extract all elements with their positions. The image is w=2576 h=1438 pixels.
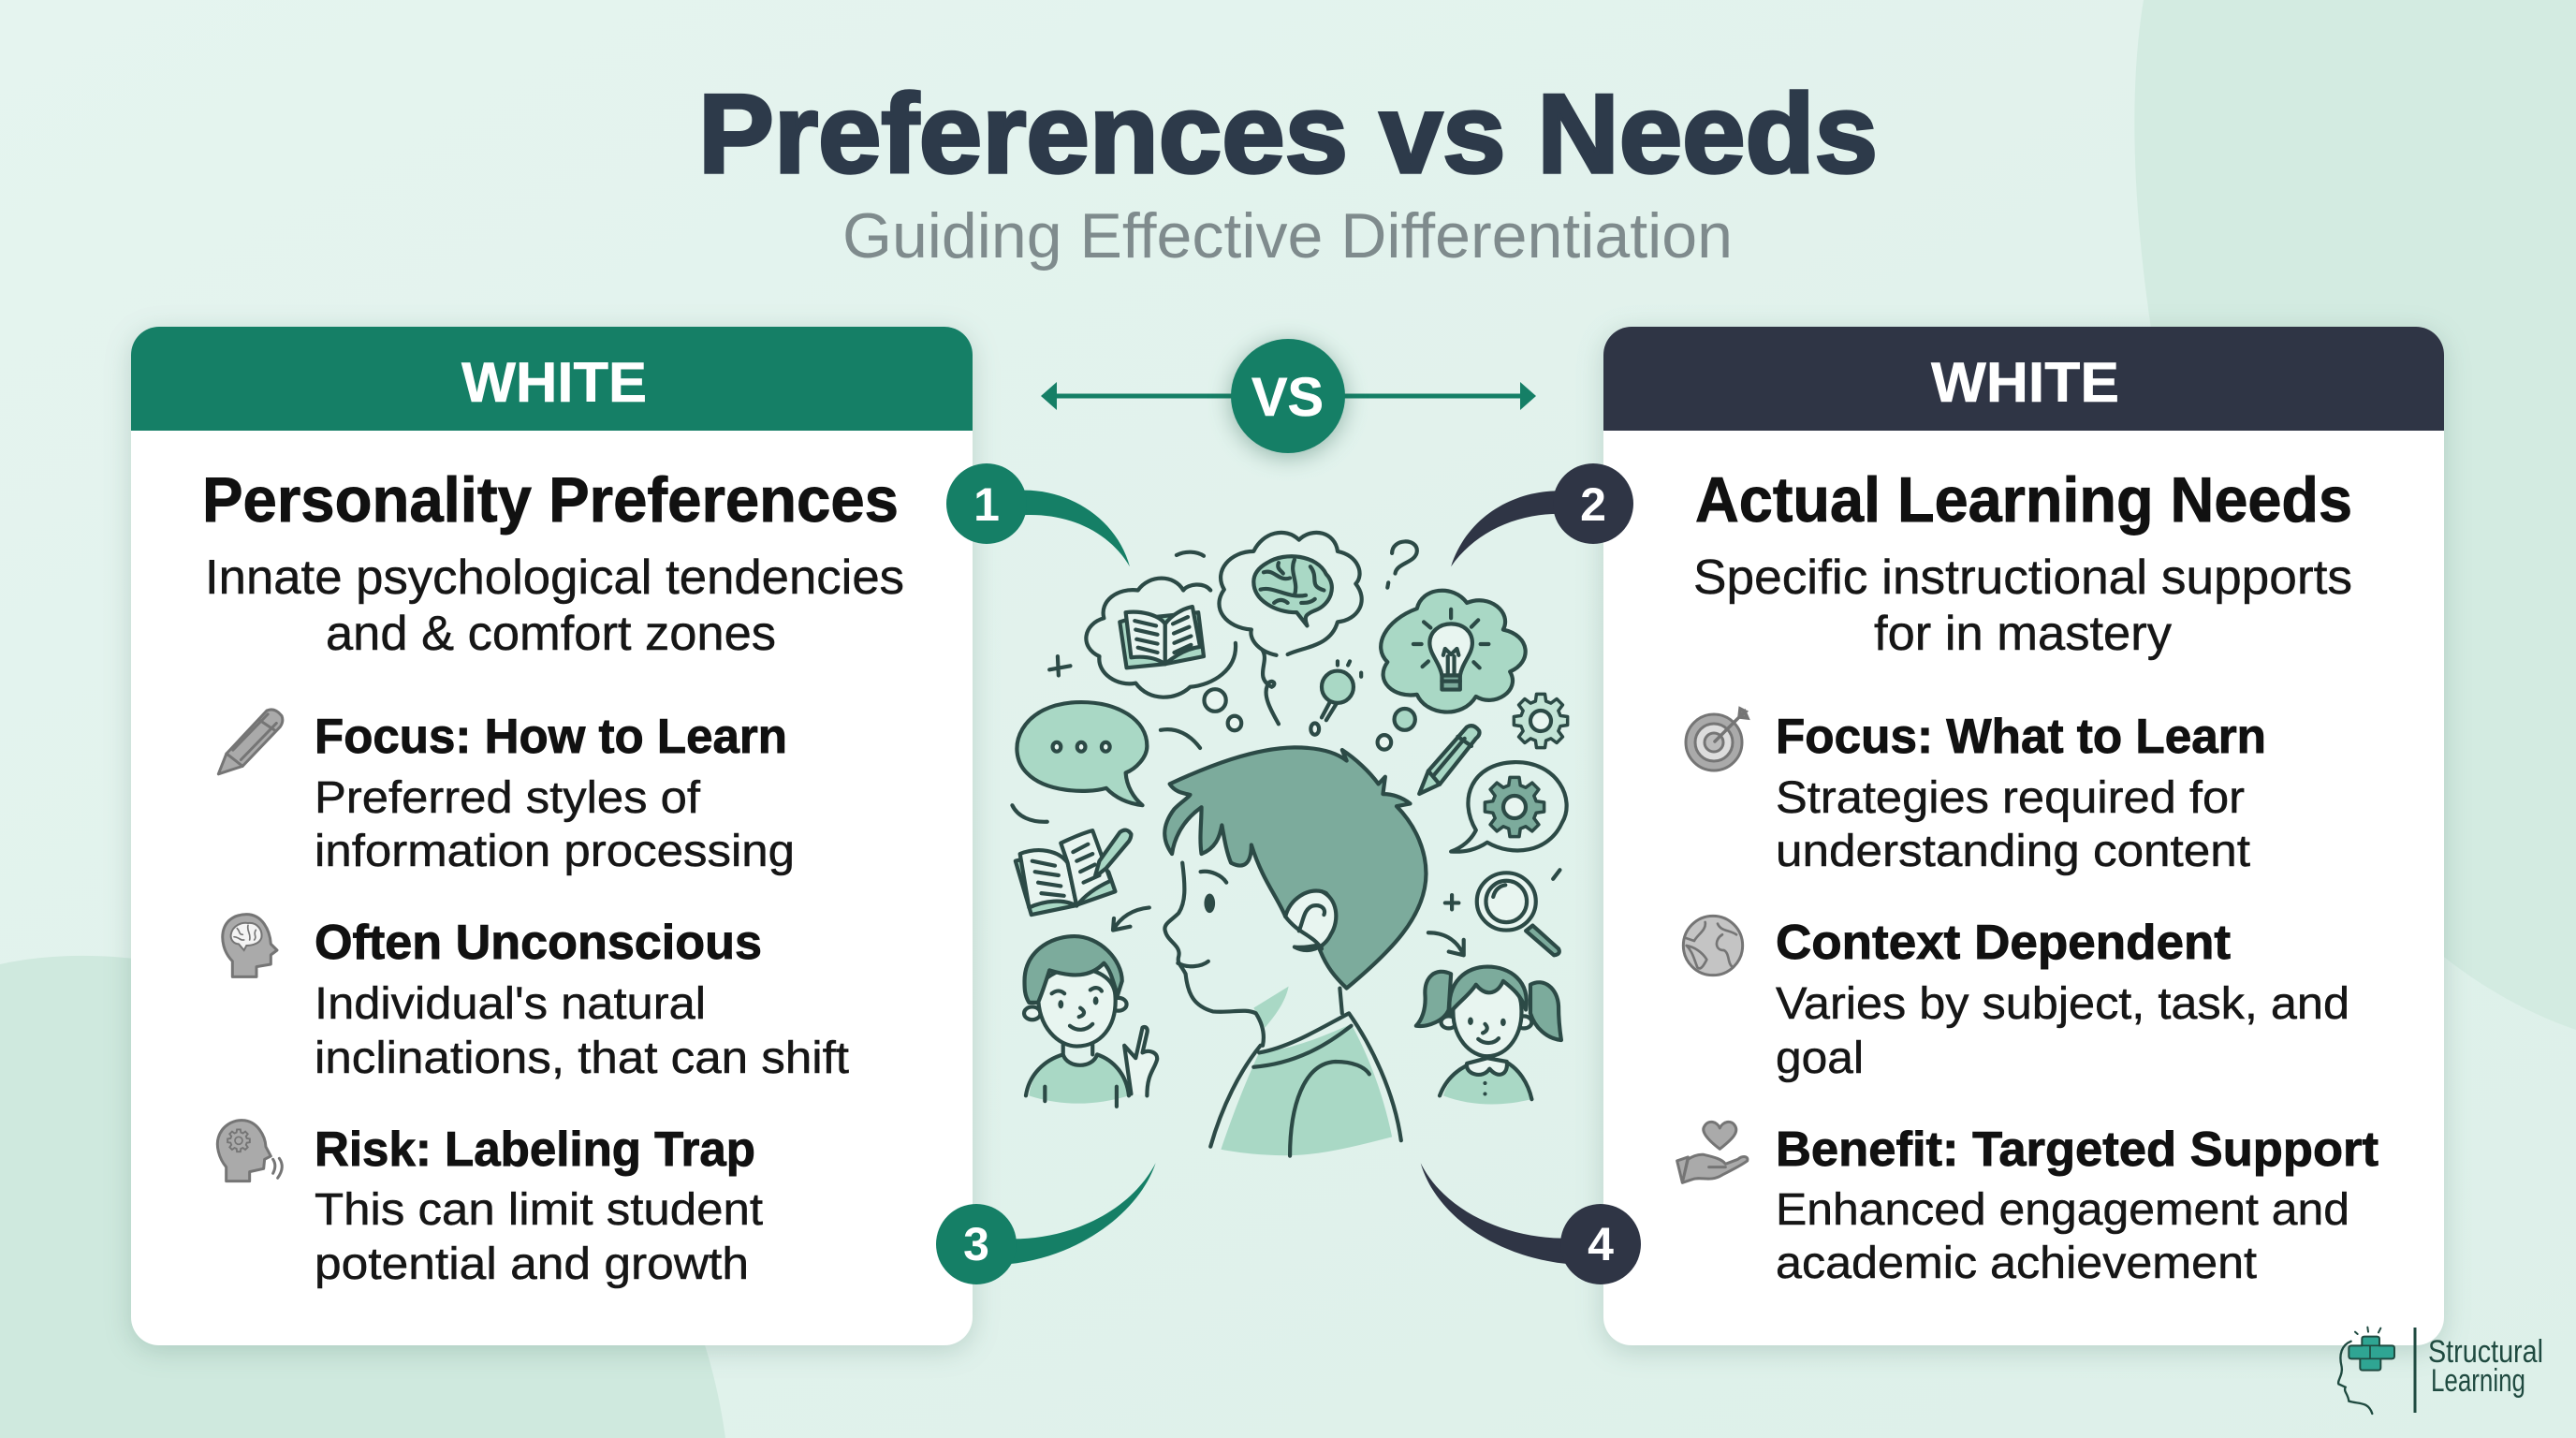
vs badge [1231, 339, 1345, 453]
heading: Personality Preferences [202, 464, 899, 536]
panel: actual learning needs [1603, 327, 2444, 1345]
item: benefit targeted support: academic achievement [1776, 1239, 2257, 1288]
connector: badge 3 tail [1009, 1163, 1156, 1264]
item: focus what to learn [1776, 710, 2266, 876]
item: benefit targeted support: Enhanced engagement and [1776, 1185, 2349, 1235]
arrow: versus double arrow [1041, 382, 1536, 410]
brain thought cloud [1219, 533, 1362, 655]
main student hair [1164, 747, 1426, 989]
book thought cloud [1086, 579, 1236, 697]
description: Specific instructional supports [1693, 550, 2352, 605]
item: risk labeling trap: Risk: Labeling Trap [315, 1123, 755, 1177]
main student face [1164, 863, 1342, 1046]
gear with bubble [1485, 777, 1544, 837]
icon: globe [1683, 916, 1743, 976]
item: context dependent [1776, 916, 2349, 1083]
item: often unconscious: inclinations, that can shift [315, 1034, 849, 1083]
item: focus how to learn: Focus: How to Learn [315, 710, 787, 764]
speech bubble outline [1451, 762, 1567, 852]
description: Innate psychological tendencies [205, 550, 904, 605]
description: and & comfort zones [326, 607, 776, 661]
icon: head with gear [217, 1121, 282, 1181]
logo text: Structural [2428, 1334, 2543, 1370]
small magnifier [1310, 661, 1361, 735]
vine [1263, 651, 1279, 724]
card background [131, 327, 973, 1345]
badge 2 [1553, 463, 1633, 544]
notebook and pencil [1016, 830, 1131, 915]
pencil doodle [1419, 726, 1480, 794]
vs badge: VS [1251, 367, 1324, 428]
small magnifier glass [1445, 870, 1559, 955]
item: risk labeling trap: potential and growth [315, 1240, 749, 1289]
item: focus how to learn: information processing [315, 827, 795, 876]
badge 1: 1 [973, 478, 1000, 531]
badge 1 [946, 463, 1027, 544]
item: often unconscious [315, 916, 849, 1083]
speech bubble [1017, 702, 1147, 805]
subtitle: Guiding Effective Differentiation [842, 200, 1733, 271]
badge 4: 4 [1588, 1218, 1614, 1270]
logo divider [2413, 1328, 2417, 1413]
thought dots [1204, 689, 1415, 750]
item: risk labeling trap [315, 1123, 763, 1289]
panel: personality preferences [131, 327, 973, 1345]
heading: Actual Learning Needs [1695, 464, 2352, 536]
item: risk labeling trap: This can limit student [315, 1185, 763, 1235]
title: Preferences vs Needs [698, 71, 1878, 197]
logo text: Learning [2431, 1363, 2525, 1399]
item: context dependent: goal [1776, 1034, 1864, 1083]
card background [1603, 327, 2444, 1345]
arrows to classmates [1113, 907, 1464, 955]
card header [131, 327, 973, 431]
badge 2: 2 [1580, 478, 1606, 531]
item: focus how to learn: Preferred styles of [315, 773, 701, 823]
logo icon [2338, 1328, 2394, 1414]
gear doodle [1514, 694, 1568, 748]
item: context dependent: Varies by subject, task, and [1776, 979, 2349, 1029]
card header: WHITE [1931, 351, 2119, 414]
description [1693, 550, 2352, 661]
logo: structural learning [2338, 1328, 2543, 1414]
icon: head with brain [223, 915, 277, 976]
lightbulb thought cloud [1381, 591, 1526, 712]
icon: pencil [218, 710, 283, 774]
card header: WHITE [461, 351, 647, 414]
connector: badge 1 tail [1025, 491, 1130, 566]
description [205, 550, 904, 661]
badge 3 [936, 1204, 1017, 1284]
girl [1416, 967, 1561, 1105]
gear center [1503, 796, 1526, 818]
icon: hand with heart [1677, 1122, 1748, 1182]
card header [1603, 327, 2444, 431]
question mark and small marks [1012, 541, 1417, 822]
item: benefit targeted support [1776, 1123, 2378, 1288]
illustration: thinking student [1012, 533, 1568, 1156]
item: focus what to learn: Strategies required for [1776, 773, 2245, 823]
item: focus what to learn: Focus: What to Learn [1776, 710, 2266, 764]
connector: badge 4 tail [1421, 1163, 1569, 1264]
item: context dependent: Context Dependent [1776, 916, 2231, 970]
badge 3: 3 [963, 1218, 989, 1270]
main student body [1210, 987, 1401, 1156]
badge 4 [1560, 1204, 1641, 1284]
item: focus how to learn [315, 710, 795, 876]
gear doodle center [1530, 711, 1551, 731]
item: often unconscious: Individual's natural [315, 979, 706, 1029]
item: benefit targeted support: Benefit: Targeted Support [1776, 1123, 2378, 1177]
logo text [2428, 1334, 2543, 1399]
student and classmates [1016, 747, 1561, 1156]
boy body [1026, 1044, 1129, 1107]
connector: badge 2 tail [1451, 491, 1556, 566]
item: often unconscious: Often Unconscious [315, 916, 762, 970]
thought bubbles and doodles [1012, 533, 1567, 852]
boy head [1024, 936, 1127, 1047]
pointing hand [1124, 1027, 1157, 1095]
item: focus what to learn: understanding content [1776, 827, 2250, 876]
icon: target [1686, 709, 1748, 770]
description: for in mastery [1874, 607, 2172, 661]
